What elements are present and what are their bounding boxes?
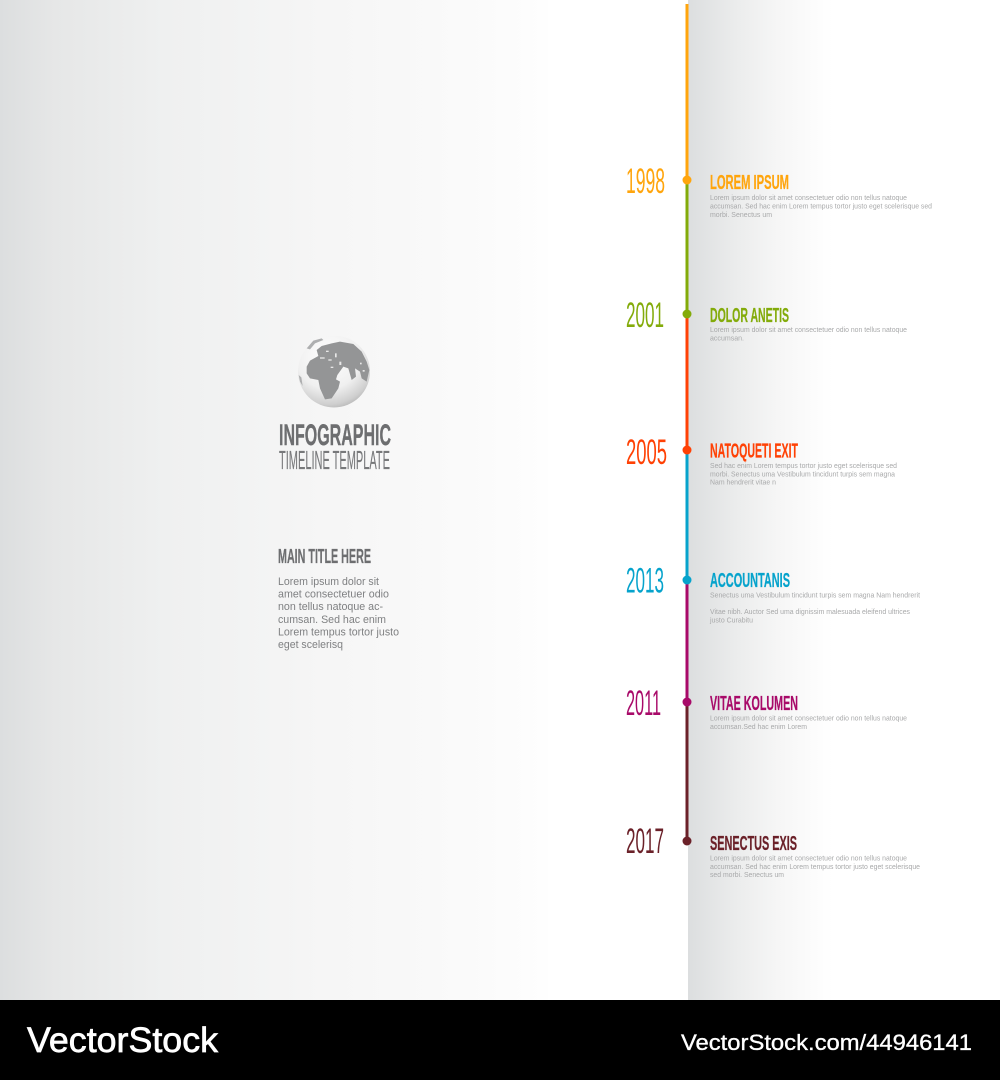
left panel gradient <box>0 0 548 1000</box>
event: 2011: VITAE KOLUMEN <box>710 693 798 715</box>
event: 1998: Lorem ipsum dolor sit amet consectetuer odio non tellus natoque <box>710 195 907 202</box>
event: 2005 <box>626 433 897 486</box>
event: 2013 <box>626 562 920 624</box>
event: 2017 <box>626 822 920 879</box>
event: 2011: 2011 <box>626 684 661 723</box>
watermark bar: VectorStock.com/44946141 <box>681 1030 972 1055</box>
event: 2005: morbi. Senectus uma Vestibulum tincidunt turpis sem magna <box>710 472 895 478</box>
event: 2013: 2013 <box>626 562 664 600</box>
event: 2017: Lorem ipsum dolor sit amet consectetuer odio non tellus natoque <box>710 856 907 862</box>
event: 2013: justo Curabitu <box>709 618 753 624</box>
event: 2001: accumsan. <box>710 336 744 342</box>
event: 1998 <box>626 162 932 219</box>
text block: intro: amet consectetuer odio <box>278 588 389 600</box>
event: 1998: 1998 <box>626 162 665 201</box>
text block: intro: cumsan. Sed hac enim <box>278 614 386 626</box>
icon: globe <box>298 336 370 408</box>
event: 2001 <box>626 296 907 342</box>
event: 2017: accumsan. Sed hac enim Lorem tempus tortor justo eget scelerisque <box>710 864 920 871</box>
watermark bar <box>0 1000 1000 1080</box>
text block: intro <box>278 576 399 651</box>
event: 2017: SENECTUS EXIS <box>710 833 797 855</box>
heading: main title: MAIN TITLE HERE <box>278 546 371 568</box>
text block: intro: Lorem ipsum dolor sit <box>278 576 379 588</box>
event: 1998: morbi. Senectus um <box>710 212 772 219</box>
event: 2011: Lorem ipsum dolor sit amet consectetuer odio non tellus natoque <box>710 716 907 722</box>
event: 2005: NATOQUETI EXIT <box>710 440 798 462</box>
event: 2013: ACCOUNTANIS <box>710 570 790 592</box>
event: 2005: 2005 <box>626 433 667 472</box>
event: 2005: Sed hac enim Lorem tempus tortor justo eget scelerisque sed <box>710 463 897 470</box>
event: 2013: Vitae nibh. Auctor Sed uma dignissim malesuada eleifend ultrices <box>710 609 910 616</box>
event: 2017: 2017 <box>626 822 664 861</box>
event: 1998: accumsan. Sed hac enim Lorem tempus tortor justo eget scelerisque sed <box>710 204 932 210</box>
event: 1998: LOREM IPSUM <box>710 172 789 194</box>
event: 2011: accumsan.Sed hac enim Lorem <box>710 724 807 731</box>
event: 2011 <box>626 684 907 731</box>
right panel gradient <box>688 0 833 1000</box>
title <box>279 419 391 475</box>
event: 2001: 2001 <box>626 296 664 335</box>
text block: intro: eget scelerisq <box>278 639 343 651</box>
text: TIMELINE TEMPLATE <box>279 445 390 475</box>
text block: intro: non tellus natoque ac- <box>278 601 383 613</box>
event: 2013: Senectus uma Vestibulum tincidunt turpis sem magna Nam hendrerit <box>710 592 920 600</box>
text block: intro: Lorem tempus tortor justo <box>278 626 399 638</box>
event: 2001: DOLOR ANETIS <box>710 305 789 327</box>
event: 2001: Lorem ipsum dolor sit amet consectetuer odio non tellus natoque <box>710 327 907 334</box>
timeline line <box>686 4 688 841</box>
watermark bar: VectorStock <box>27 1021 219 1060</box>
title: INFOGRAPHIC <box>279 419 391 452</box>
event: 2005: Nam hendrerit vitae n <box>710 480 776 486</box>
event: 2017: sed morbi. Senectus um <box>710 872 784 879</box>
